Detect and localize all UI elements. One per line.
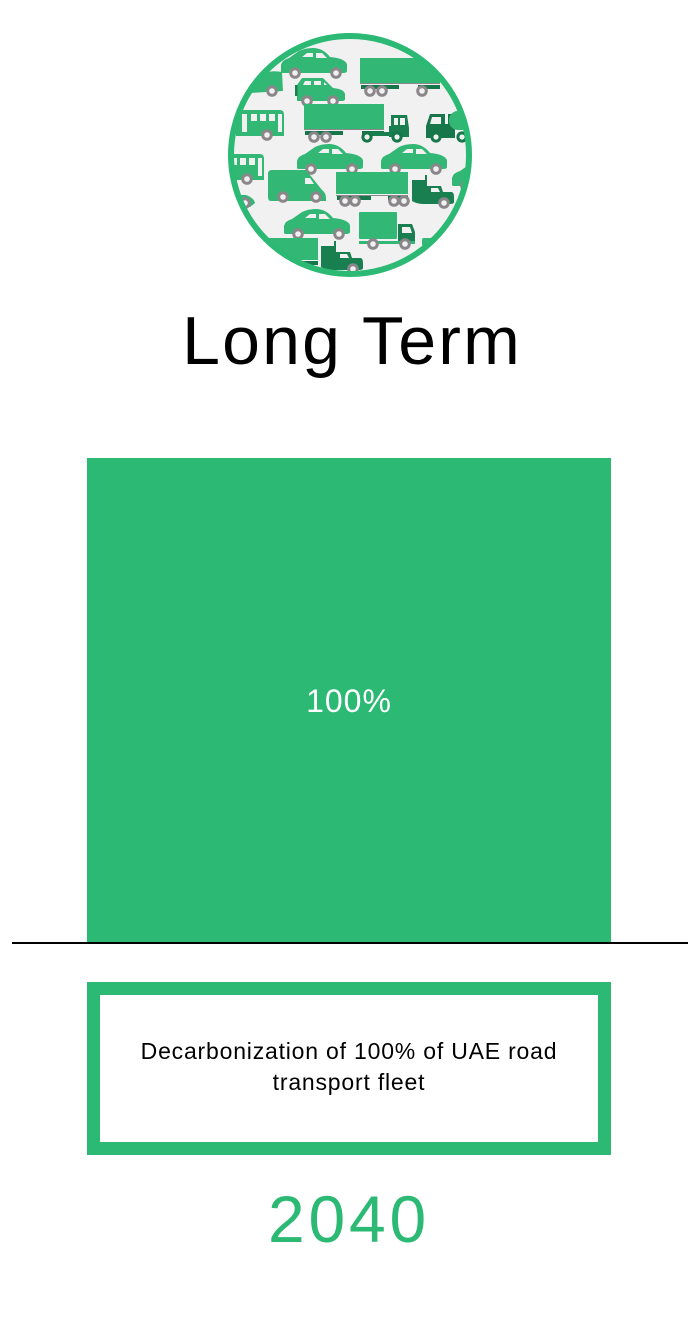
title: Long Term <box>182 303 522 379</box>
vehicles group <box>234 48 466 271</box>
description text <box>141 1038 557 1095</box>
year: 2040 <box>268 1182 430 1256</box>
description text: transport fleet <box>273 1069 425 1095</box>
bar value: 100% <box>306 683 392 719</box>
circle background <box>231 36 469 274</box>
callout: description box <box>87 982 611 1155</box>
description text: Decarbonization of 100% of UAE road <box>141 1038 557 1064</box>
bar: 100% <box>87 458 611 943</box>
circle border <box>231 36 469 274</box>
icon: circular road traffic illustration <box>228 33 472 277</box>
